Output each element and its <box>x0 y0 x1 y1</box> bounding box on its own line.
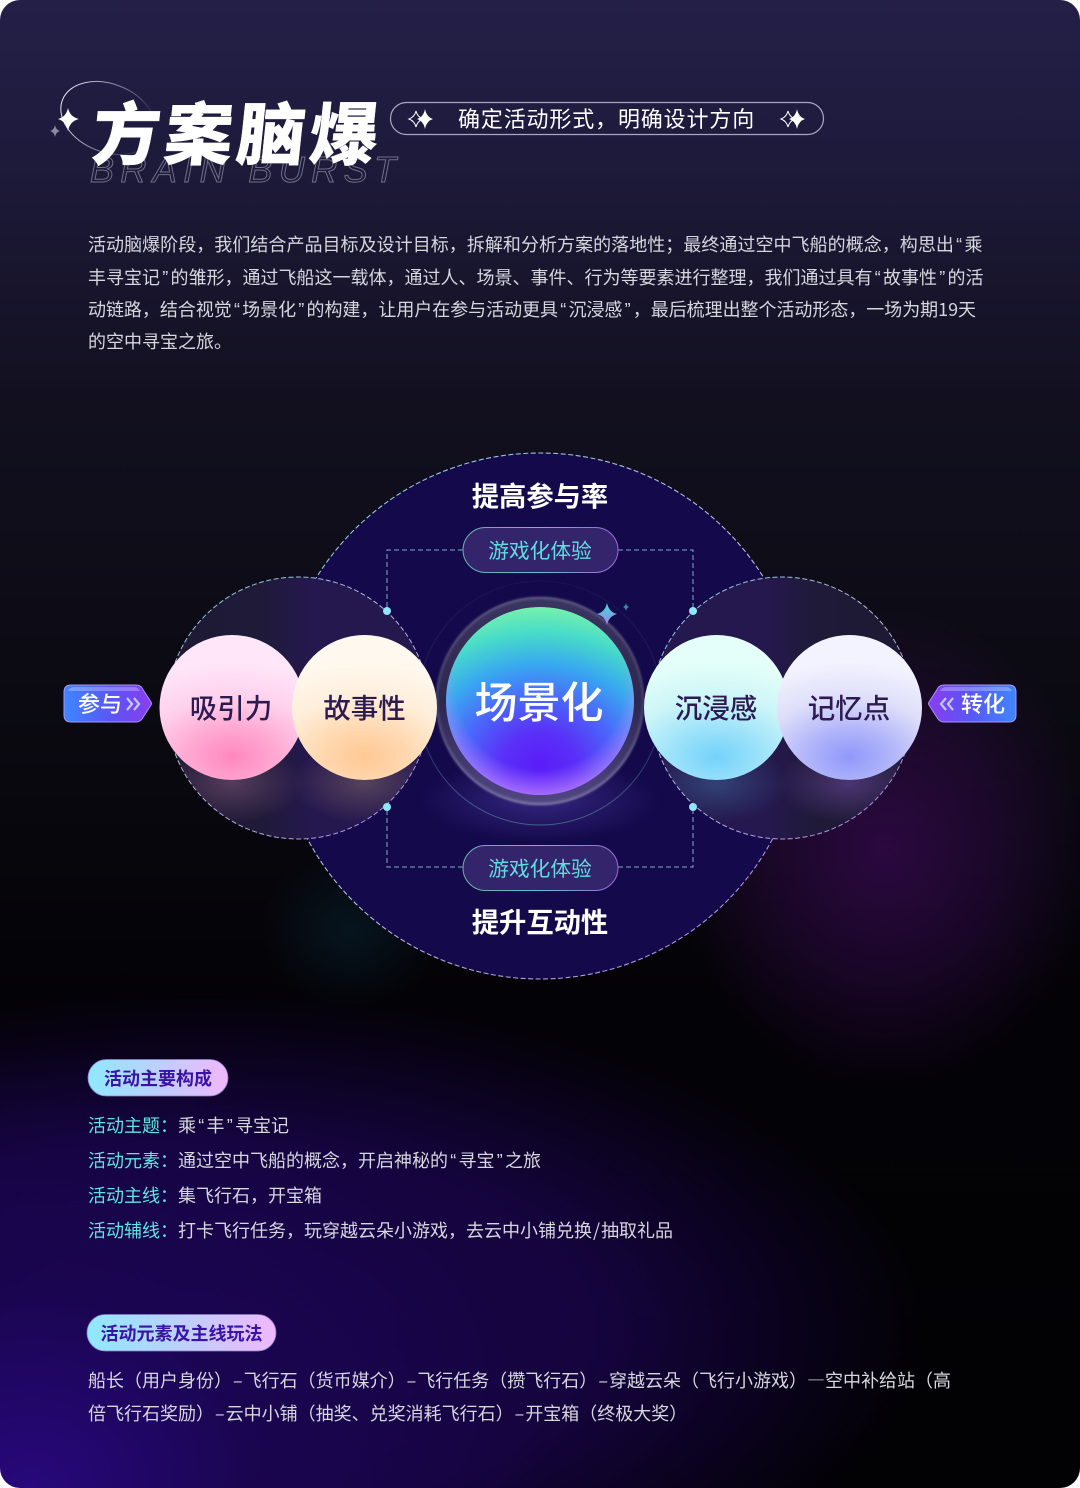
icon: sparkles <box>597 603 629 625</box>
heading: bottom goal: 提升互动性 <box>472 900 608 940</box>
title: 方案脑爆 <box>88 80 388 179</box>
tag: participate <box>64 685 152 722</box>
sphere: attraction <box>160 635 304 780</box>
connector dots <box>383 607 697 811</box>
sphere: memory point: 记忆点 <box>808 686 890 726</box>
icon: right sparkle <box>781 109 805 129</box>
list: activity composition <box>88 1112 673 1243</box>
diagram and header artwork <box>50 80 1016 1352</box>
heading pill: main components: 活动主要构成 <box>104 1065 212 1091</box>
list: activity composition: 活动主题：乘“丰”寻宝记 <box>88 1112 289 1138</box>
intro paragraph: 丰寻宝记”的雏形，通过飞船这一载体，通过人、场景、事件、行为等要素进行整理，我们通过具有“故事性”的活 <box>88 264 984 290</box>
subtitle pill <box>390 102 824 134</box>
bottom pill: gamified experience <box>463 846 618 890</box>
list: activity composition: 活动主线：集飞行石，开宝箱 <box>88 1182 322 1208</box>
panel: left glass circle <box>160 577 437 839</box>
subtitle pill: 确定活动形式，明确设计方向 <box>458 102 755 134</box>
sphere: memory point <box>777 635 922 780</box>
heading: top goal: 提高参与率 <box>472 474 608 514</box>
intro paragraph: 活动脑爆阶段，我们结合产品目标及设计目标，拆解和分析方案的落地性；最终通过空中飞船的概念，构思出“乘 <box>88 231 983 257</box>
text block: gameplay chain <box>88 1367 951 1426</box>
sphere: immersion <box>644 635 789 780</box>
heading pill: main components <box>88 1060 228 1096</box>
sphere: story: 故事性 <box>323 686 406 726</box>
intro paragraph: 的空中寻宝之旅。 <box>88 328 232 354</box>
top pill: gamified experience: 游戏化体验 <box>488 534 592 564</box>
central sphere: scene: 场景化 <box>474 669 604 731</box>
heading pill: elements and gameplay <box>87 1314 276 1351</box>
intro paragraph <box>88 231 984 354</box>
panel: right glass circle <box>644 577 922 839</box>
text block: gameplay chain: 船长（用户身份）–飞行石（货币媒介）–飞行任务（攒飞行石）–穿越云朵（飞行小游戏）—空中补给站（高 <box>88 1367 951 1393</box>
central sphere: scene <box>418 581 662 825</box>
connector lines <box>387 550 693 867</box>
tag: participate: 参与 <box>78 687 122 719</box>
list: activity composition: 活动辅线：打卡飞行任务，玩穿越云朵小游戏，去云中小铺兑换/抽取礼品 <box>88 1217 673 1243</box>
icon: title orbit and sparkles <box>50 68 166 168</box>
icon: left sparkle <box>409 109 433 129</box>
sphere: attraction: 吸引力 <box>190 686 272 726</box>
english outline subtitle: BRAIN BURST <box>90 149 399 190</box>
sphere: immersion: 沉浸感 <box>675 686 757 726</box>
tag: convert <box>928 685 1016 722</box>
bottom pill: gamified experience: 游戏化体验 <box>488 852 592 882</box>
sphere: story <box>292 635 437 780</box>
list: activity composition: 活动元素：通过空中飞船的概念，开启神秘的“寻宝”之旅 <box>88 1147 541 1173</box>
intro paragraph: 动链路，结合视觉“场景化”的构建，让用户在参与活动更具“沉浸感”，最后梳理出整个活动形态，一场为期19天 <box>88 296 976 322</box>
heading pill: elements and gameplay: 活动元素及主线玩法 <box>100 1320 262 1346</box>
tag: convert: 转化 <box>961 687 1005 719</box>
top pill: gamified experience <box>463 528 618 572</box>
text block: gameplay chain: 倍飞行石奖励）–云中小铺（抽奖、兑奖消耗飞行石）–开宝箱（终极大奖） <box>88 1400 687 1426</box>
panel: large goal circle <box>307 452 773 980</box>
